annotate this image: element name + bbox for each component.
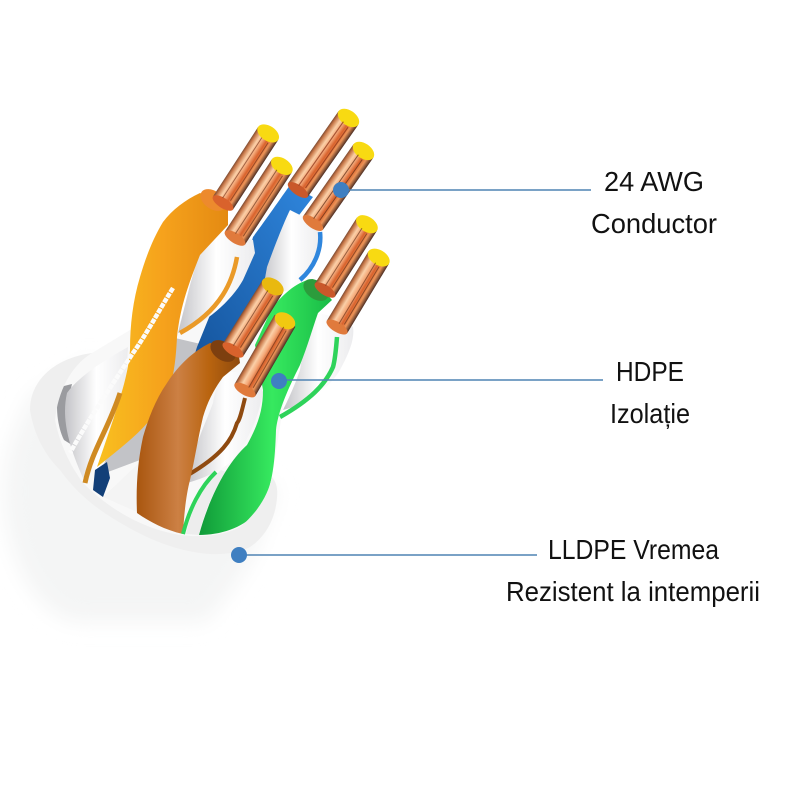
jacket front rim — [30, 353, 277, 554]
white wire with green stripe — [183, 313, 353, 535]
conductor 1 — [210, 121, 282, 214]
callout: jacket: Rezistent la intemperii — [506, 576, 760, 607]
callout: conductor: Conductor — [591, 208, 717, 239]
callout: insulation: Izolație — [610, 398, 690, 429]
green wire — [199, 275, 333, 535]
white wire with orange stripe — [178, 230, 255, 333]
orange wire — [85, 185, 230, 483]
white wire with blue stripe — [262, 210, 321, 295]
callout: conductor — [333, 166, 717, 239]
white wire behind orange — [65, 347, 128, 478]
callout: conductor: 24 AWG — [604, 166, 704, 197]
grey cavity between wires — [57, 384, 72, 445]
conductor 7 — [220, 274, 287, 361]
callout: insulation — [271, 356, 690, 429]
conductors — [210, 105, 393, 400]
white wire with brown stripe — [187, 372, 263, 483]
callout: insulation: HDPE — [616, 356, 684, 387]
conductor 5 — [312, 211, 381, 301]
callout: jacket — [231, 534, 760, 607]
dark blue sliver — [93, 462, 110, 497]
bottom white wire — [103, 440, 145, 512]
conductor 4 — [300, 138, 378, 234]
grey interior shade — [100, 338, 205, 475]
cable jacket body — [4, 360, 278, 622]
conductor 2 — [222, 153, 296, 249]
twisted white string — [70, 288, 173, 453]
callout: jacket: LLDPE Vremea — [548, 534, 719, 565]
brown wire — [137, 336, 240, 534]
conductor 3 — [285, 105, 363, 201]
blue wire — [185, 185, 313, 385]
conductor 8 — [232, 308, 299, 400]
jacket inner opening — [55, 300, 300, 536]
conductor 6 — [324, 245, 393, 337]
